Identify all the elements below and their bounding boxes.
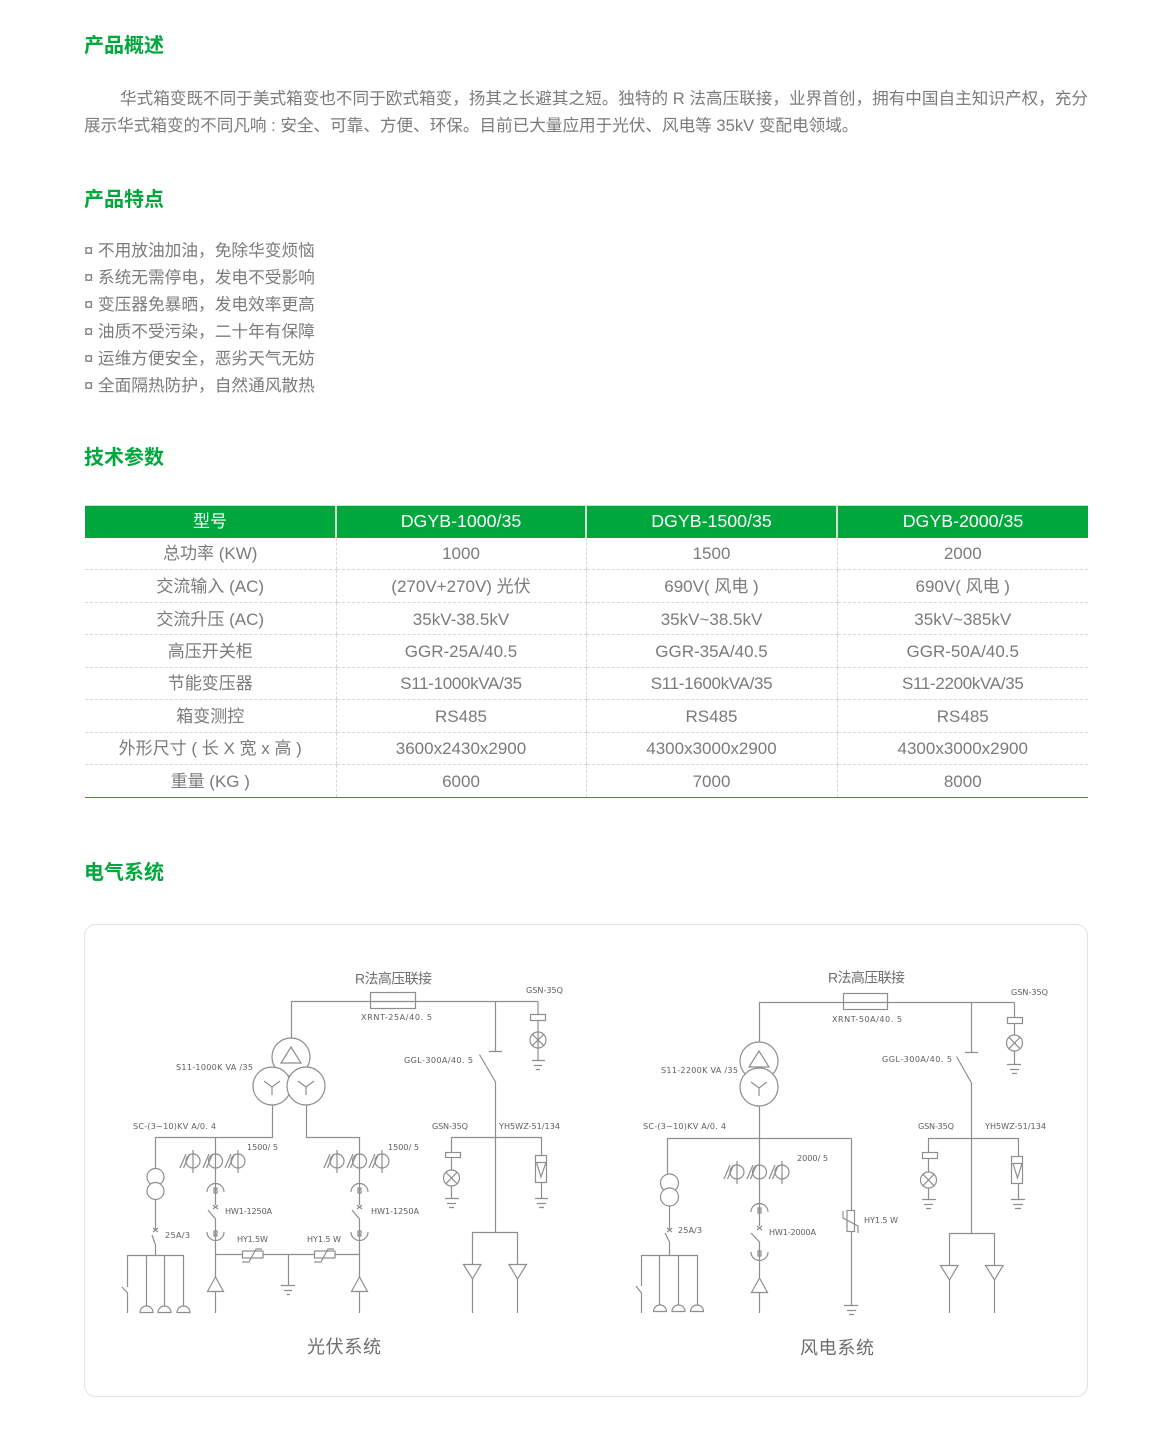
wind auxiliary transformer and low-voltage branch: 25A/3 <box>678 1225 702 1235</box>
PV left feeder <box>180 1138 278 1313</box>
wind auxiliary transformer and low-voltage branch <box>636 1121 852 1313</box>
wind surge protector and ground <box>843 1138 898 1314</box>
PV surge protectors and ground: HY1.5 W <box>307 1234 341 1244</box>
PV indicator GSN-35Q top: GSN-35Q <box>526 985 563 995</box>
table: technical parameters: GGR-35A/40.5 <box>655 642 768 661</box>
table: technical parameters: 交流升压 (AC) <box>156 610 264 629</box>
PV left feeder: 1500/ 5 <box>247 1142 278 1152</box>
table: technical parameters: 重量 (KG ) <box>171 772 250 791</box>
table: technical parameters: 总功率 (KW) <box>163 544 257 563</box>
table: technical parameters: 节能变压器 <box>168 674 253 693</box>
wind caption: 风电系统 <box>800 1338 874 1358</box>
wind load switch and main line <box>882 1054 1003 1313</box>
PV high-voltage bus and fuse <box>292 992 538 1052</box>
wind indicator GSN-35Q top <box>1006 987 1048 1074</box>
table: technical parameters: GGR-50A/40.5 <box>907 642 1019 661</box>
table: technical parameters: S11-2200kVA/35 <box>902 674 1024 693</box>
list: product features: ¤ 系统无需停电，发电不受影响 <box>84 268 315 287</box>
heading: 产品特点: 产品特点 <box>84 189 164 211</box>
table: technical parameters: GGR-25A/40.5 <box>405 642 517 661</box>
table: technical parameters: 箱变测控 <box>176 707 244 726</box>
table: technical parameters: DGYB-2000/35 <box>903 511 1023 531</box>
PV auxiliary transformer and low-voltage branch: 25A/3 <box>165 1230 190 1240</box>
table: technical parameters: 690V( 风电 ) <box>664 577 759 596</box>
table: technical parameters: 1000 <box>442 544 480 563</box>
diagram: wind power system <box>636 970 1048 1358</box>
wind main feeder <box>724 1106 828 1313</box>
wind high-voltage bus and fuse <box>760 994 1014 1052</box>
PV left feeder: HW1-1250A <box>225 1206 272 1216</box>
table: technical parameters: S11-1600kVA/35 <box>651 674 772 693</box>
PV transformer <box>176 1038 325 1105</box>
table: technical parameters: 外形尺寸 ( 长 X 宽 x 高 ) <box>119 739 302 758</box>
heading: 产品概述: 产品概述 <box>84 35 164 57</box>
PV arrester branch <box>432 1121 560 1208</box>
list: product features: ¤ 油质不受污染，二十年有保障 <box>84 322 315 341</box>
wind load switch and main line: GGL-300A/40. 5 <box>882 1054 952 1064</box>
PV load switch and main line <box>404 1054 526 1313</box>
panel: electrical system <box>84 924 1088 1397</box>
PV auxiliary transformer and low-voltage branch <box>122 1105 272 1313</box>
list: product features <box>84 241 315 395</box>
wind transformer: S11-2200K VA /35 <box>661 1065 738 1075</box>
wind indicator GSN-35Q top: GSN-35Q <box>1011 987 1048 997</box>
PV surge protectors and ground: HY1.5W <box>237 1234 268 1244</box>
table: technical parameters <box>85 505 1088 797</box>
PV surge protectors and ground <box>216 1234 360 1294</box>
table: technical parameters: 8000 <box>944 772 982 791</box>
table: technical parameters: 高压开关柜 <box>168 642 253 661</box>
table: technical parameters: DGYB-1000/35 <box>401 511 521 531</box>
table: technical parameters: 4300x3000x2900 <box>646 739 777 758</box>
PV title: R法高压联接 <box>355 970 432 986</box>
table: technical parameters: 2000 <box>944 544 982 563</box>
text block: product overview: 华式箱变既不同于美式箱变也不同于欧式箱变，扬其之长避其之短。独特的 R 法高压联接，业界首创，拥有中国自主知识产权，充分 <box>120 89 1088 108</box>
table: technical parameters: 型号 <box>193 512 227 531</box>
PV load switch and main line: GGL-300A/40. 5 <box>404 1055 473 1065</box>
PV arrester branch: GSN-35Q <box>432 1121 468 1131</box>
list: product features: ¤ 变压器免暴晒，发电效率更高 <box>84 295 315 314</box>
table: technical parameters: 交流输入 (AC) <box>156 577 264 596</box>
table: technical parameters: 7000 <box>693 772 730 791</box>
table: technical parameters: 690V( 风电 ) <box>916 577 1010 596</box>
PV arrester branch: YH5WZ-51/134 <box>498 1121 560 1131</box>
wind transformer <box>661 1042 778 1106</box>
table: technical parameters: (270V+270V) 光伏 <box>391 577 531 596</box>
PV right feeder <box>306 1105 419 1313</box>
wind arrester branch <box>918 1121 1046 1208</box>
table: technical parameters: 4300x3000x2900 <box>898 739 1028 758</box>
table: technical parameters: RS485 <box>937 707 989 726</box>
PV high-voltage bus and fuse: XRNT-25A/40. 5 <box>361 1012 432 1022</box>
diagram: PV system <box>122 970 563 1357</box>
PV caption: 光伏系统 <box>307 1337 381 1357</box>
wind title: R法高压联接 <box>828 970 905 986</box>
PV right feeder: 1500/ 5 <box>388 1142 419 1152</box>
list: product features: ¤ 全面隔热防护，自然通风散热 <box>84 376 315 395</box>
wind high-voltage bus and fuse: XRNT-50A/40. 5 <box>832 1014 902 1024</box>
PV right feeder: HW1-1250A <box>371 1206 419 1216</box>
table: technical parameters: 35kV~38.5kV <box>661 610 762 629</box>
wind main feeder: HW1-2000A <box>769 1227 816 1237</box>
list: product features: ¤ 不用放油加油，免除华变烦恼 <box>84 241 315 260</box>
table: technical parameters: 1500 <box>693 544 730 563</box>
table: technical parameters: DGYB-1500/35 <box>651 511 772 531</box>
text block: product overview <box>84 89 1088 135</box>
PV auxiliary transformer and low-voltage branch: SC-(3~10)KV A/0. 4 <box>133 1121 216 1131</box>
table: technical parameters: 3600x2430x2900 <box>396 739 526 758</box>
PV transformer: S11-1000K VA /35 <box>176 1062 253 1072</box>
heading: 技术参数: 技术参数 <box>84 447 164 469</box>
table: technical parameters: RS485 <box>435 707 487 726</box>
wind arrester branch: YH5WZ-51/134 <box>984 1121 1046 1131</box>
table: technical parameters: RS485 <box>686 707 737 726</box>
wind main feeder: 2000/ 5 <box>797 1153 828 1163</box>
wind arrester branch: GSN-35Q <box>918 1121 954 1131</box>
PV indicator GSN-35Q top <box>526 985 563 1070</box>
list: product features: ¤ 运维方便安全，恶劣天气无妨 <box>84 349 315 368</box>
wind surge protector and ground: HY1.5 W <box>864 1215 898 1225</box>
text block: product overview: 展示华式箱变的不同凡响 : 安全、可靠、方便、环保。目前已大量应用于光伏、风电等 35kV 变配电领域。 <box>84 116 858 135</box>
table: technical parameters: 35kV~385kV <box>914 610 1011 629</box>
table: technical parameters: 6000 <box>442 772 480 791</box>
table: technical parameters: S11-1000kVA/35 <box>400 674 522 693</box>
wind auxiliary transformer and low-voltage branch: SC-(3~10)KV A/0. 4 <box>643 1121 726 1131</box>
table: technical parameters: 35kV-38.5kV <box>413 610 509 629</box>
heading: 电气系统: 电气系统 <box>84 862 164 884</box>
